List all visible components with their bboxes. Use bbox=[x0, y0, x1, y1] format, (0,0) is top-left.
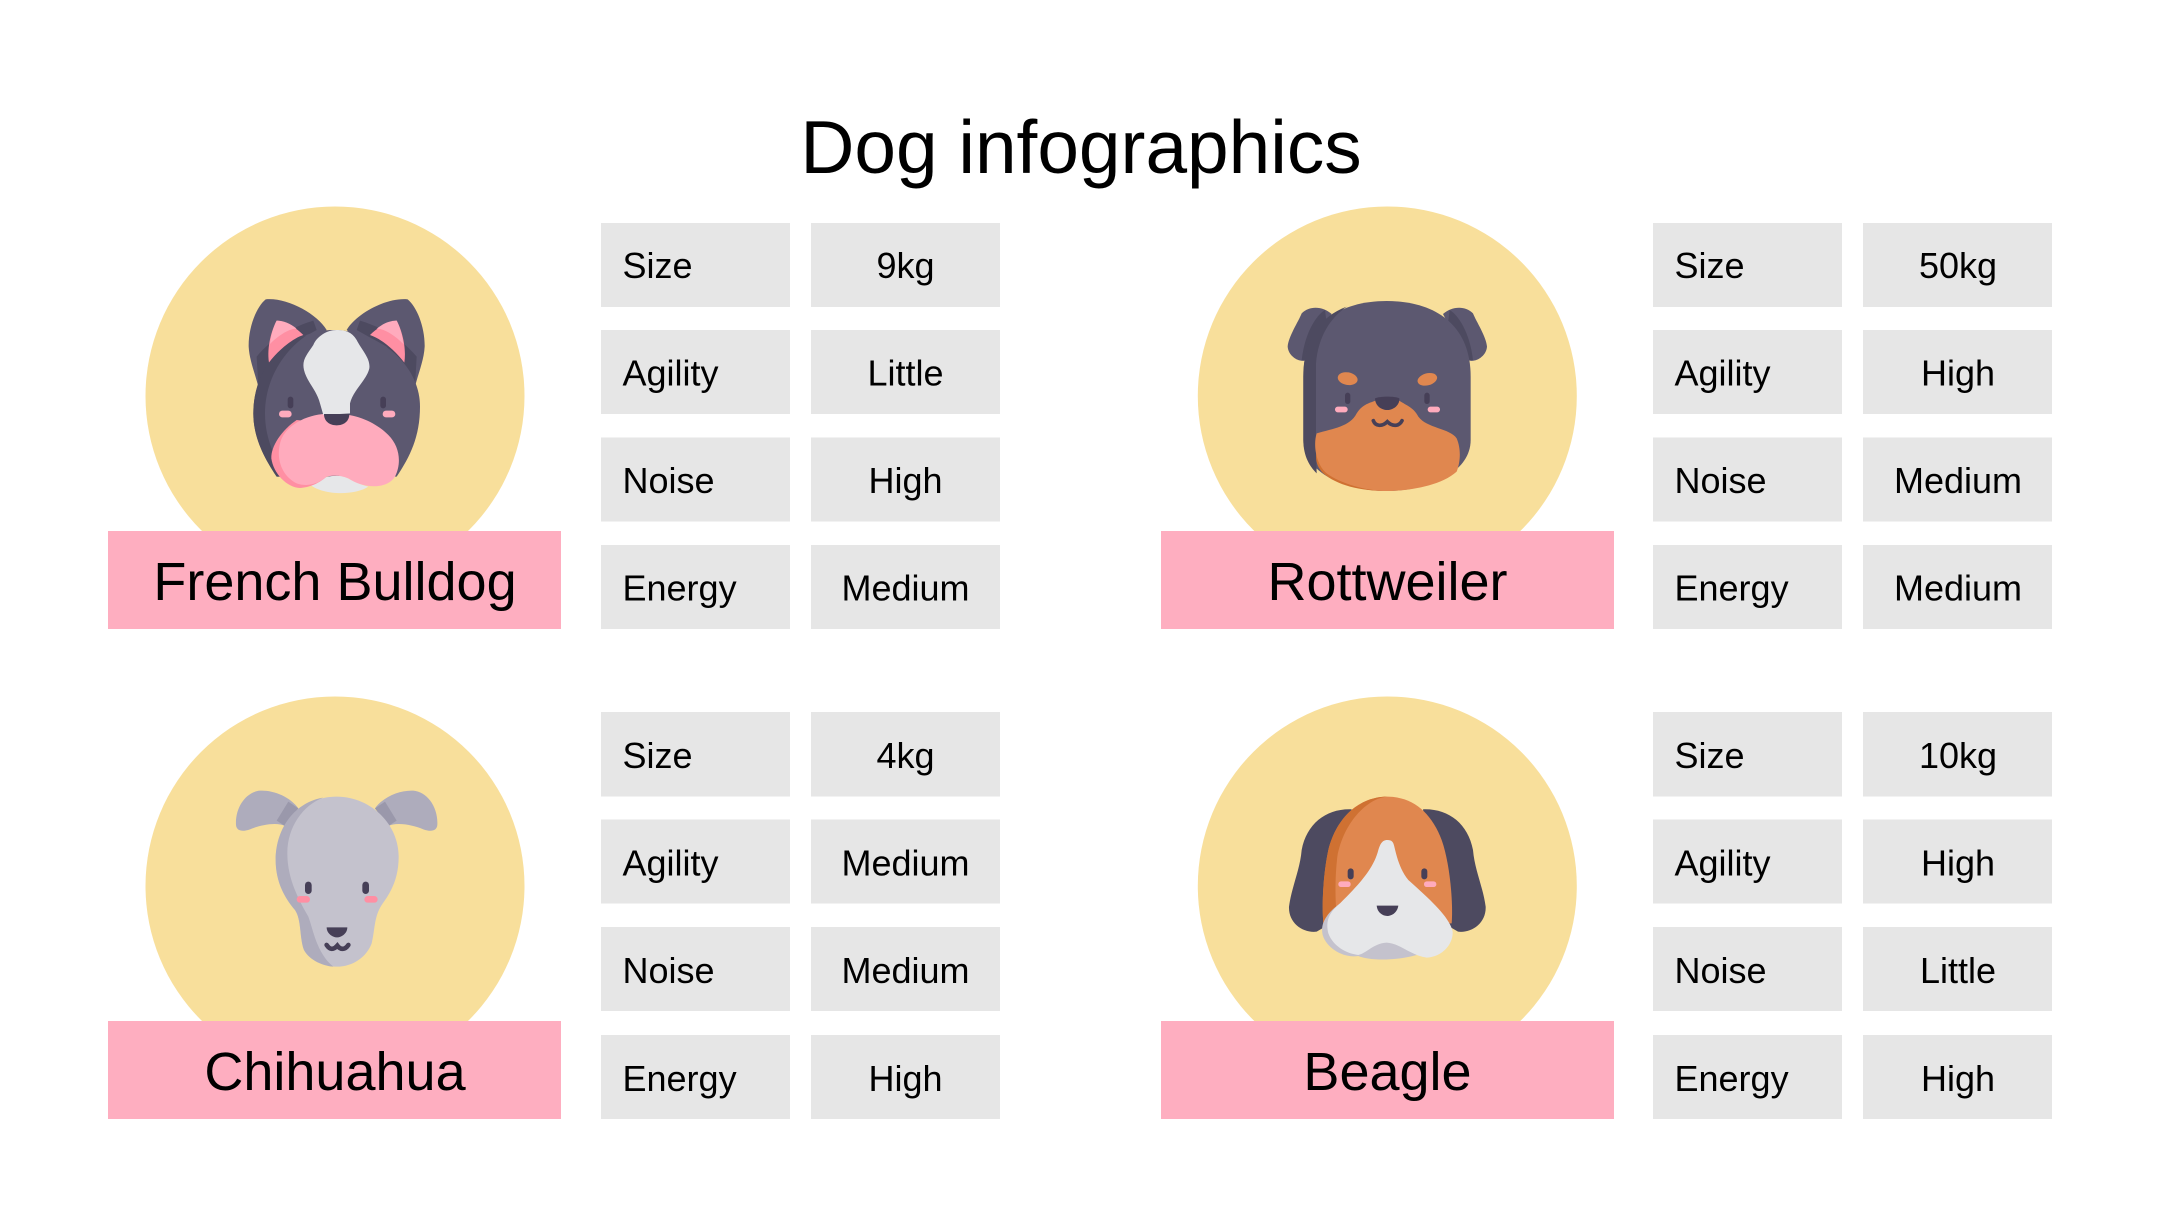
panel: French Bulldog bbox=[108, 206, 1000, 629]
name banner: Rottweiler bbox=[1267, 552, 1508, 612]
stats table: Energy bbox=[1674, 1058, 1789, 1099]
stats table: Medium bbox=[841, 568, 970, 608]
stats table: Little bbox=[1920, 950, 1996, 991]
stats table: Little bbox=[867, 352, 944, 394]
stats table bbox=[601, 223, 1000, 629]
circle background bbox=[146, 696, 524, 1076]
stats table: Noise bbox=[622, 950, 715, 991]
stats table: High bbox=[1921, 1058, 1995, 1099]
stats table bbox=[1653, 223, 2052, 629]
stats table: Energy bbox=[1674, 568, 1789, 608]
stats table: Noise bbox=[1674, 460, 1767, 501]
stats table: Energy bbox=[622, 1058, 737, 1099]
stats table: High bbox=[868, 1058, 943, 1099]
icon: Rottweiler face bbox=[1288, 301, 1487, 491]
name banner bbox=[1161, 1021, 1614, 1119]
stats table: Noise bbox=[622, 460, 715, 501]
stats table: Noise bbox=[1674, 950, 1767, 991]
name banner: Chihuahua bbox=[204, 1042, 467, 1102]
stats table: High bbox=[1921, 842, 1995, 884]
stats table bbox=[1653, 712, 2052, 1119]
title: Dog infographics bbox=[800, 105, 1362, 189]
stats table: Agility bbox=[1674, 352, 1771, 394]
stats table: Size bbox=[1674, 735, 1745, 776]
stats table: High bbox=[868, 460, 943, 501]
stats table: Agility bbox=[622, 842, 719, 884]
stats table: Medium bbox=[1894, 460, 2022, 501]
name banner: French Bulldog bbox=[153, 552, 517, 612]
stats table: Agility bbox=[622, 352, 719, 394]
stats table: 10kg bbox=[1919, 735, 1997, 776]
stats table: Medium bbox=[1894, 568, 2022, 608]
name banner bbox=[108, 531, 561, 629]
stats table: Agility bbox=[1674, 842, 1771, 884]
panel: Rottweiler bbox=[1161, 206, 2052, 629]
stats table: Energy bbox=[622, 568, 737, 608]
stats table: Medium bbox=[841, 950, 970, 991]
stats table: Medium bbox=[841, 842, 970, 884]
circle background bbox=[146, 206, 524, 586]
icon: Chihuahua face bbox=[236, 791, 437, 967]
name banner bbox=[1161, 531, 1614, 629]
stats table: 4kg bbox=[876, 735, 935, 776]
circle background bbox=[1198, 206, 1577, 586]
name banner bbox=[108, 1021, 561, 1119]
icon: Beagle face bbox=[1289, 797, 1486, 960]
stats table bbox=[601, 712, 1000, 1119]
stats table: High bbox=[1921, 352, 1995, 394]
stats table: 9kg bbox=[876, 245, 935, 286]
icon: French Bulldog face bbox=[249, 299, 425, 493]
panel: Beagle bbox=[1161, 696, 2052, 1119]
stats table: Size bbox=[622, 735, 693, 776]
circle background bbox=[1198, 696, 1577, 1076]
panel: Chihuahua bbox=[108, 696, 1000, 1119]
stats table: 50kg bbox=[1919, 245, 1997, 286]
stats table: Size bbox=[1674, 245, 1745, 286]
name banner: Beagle bbox=[1303, 1042, 1472, 1102]
stats table: Size bbox=[622, 245, 693, 286]
